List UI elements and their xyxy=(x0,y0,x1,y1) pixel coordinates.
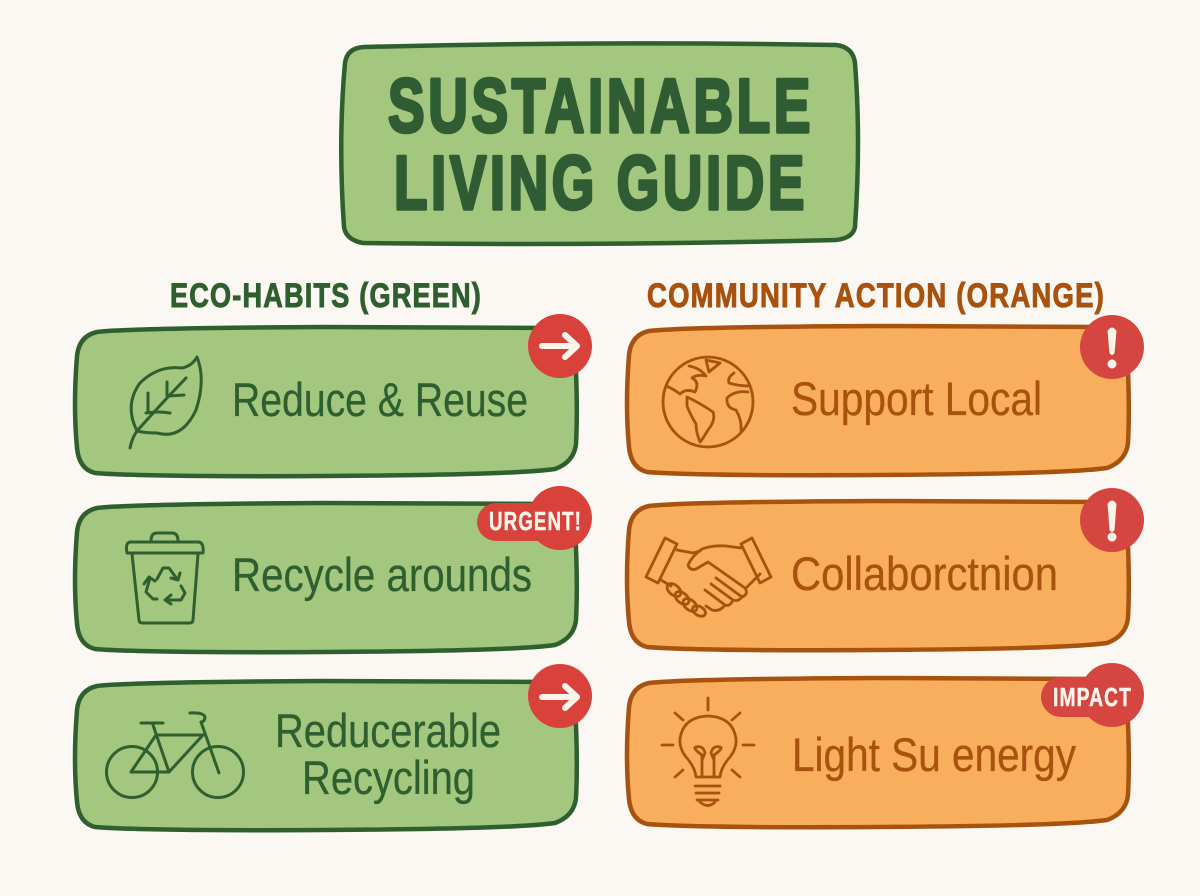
badge: urgent xyxy=(477,486,592,550)
heading: community action: COMMUNITY ACTION (ORANGE) xyxy=(647,277,1105,315)
panel: collaboration xyxy=(627,488,1144,650)
icon: globe xyxy=(663,357,753,447)
title: LIVING GUIDE xyxy=(394,141,808,226)
label: Reducerable xyxy=(275,704,501,757)
icon: bicycle xyxy=(106,713,244,798)
heading: eco-habits: ECO-HABITS (GREEN) xyxy=(170,277,482,315)
icon: leaf xyxy=(130,357,201,448)
label: Reduce & Reuse xyxy=(232,373,528,426)
icon: recycling bin xyxy=(126,533,203,623)
icon: handshake xyxy=(646,538,771,618)
panel: recycle arounds xyxy=(75,486,592,652)
label xyxy=(275,704,501,804)
title: SUSTAINABLE xyxy=(388,64,814,149)
label: Recycle arounds xyxy=(232,548,532,601)
badge: exclamation xyxy=(1080,488,1144,552)
badge: exclamation xyxy=(1080,315,1144,379)
label: Support Local xyxy=(791,372,1042,425)
panel: reducerable recycling xyxy=(75,664,592,830)
label: Collaborctnion xyxy=(791,547,1058,600)
icon: light bulb xyxy=(662,698,754,806)
panel: reduce and reuse xyxy=(75,314,592,476)
badge: urgent: URGENT! xyxy=(489,506,582,536)
panel: light energy xyxy=(627,663,1144,827)
badge: impact xyxy=(1041,663,1144,727)
badge: arrow xyxy=(528,664,592,728)
badge: arrow xyxy=(528,314,592,378)
badge: impact: IMPACT xyxy=(1053,682,1132,712)
label: Light Su energy xyxy=(792,728,1076,781)
panel: support local xyxy=(627,315,1144,475)
title xyxy=(341,43,858,244)
label: Recycling xyxy=(302,751,475,804)
